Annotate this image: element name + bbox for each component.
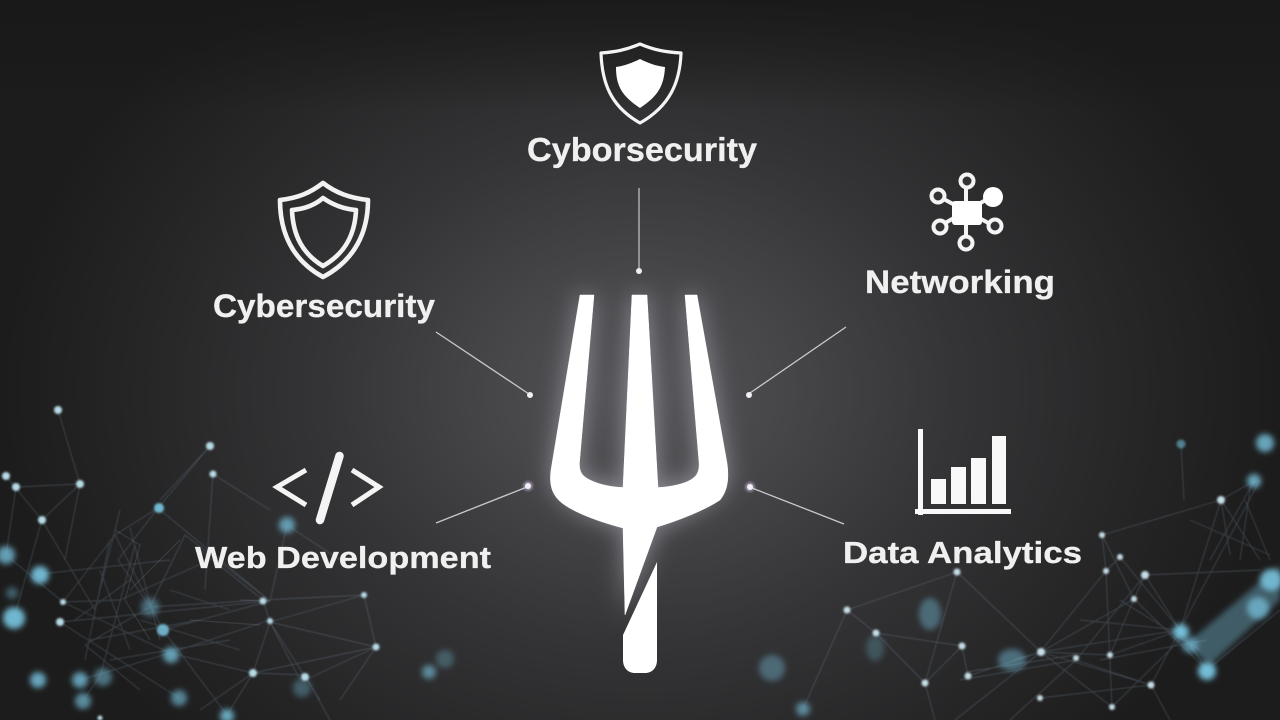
small bright nodes: [844, 496, 1225, 710]
label: Networking: Networking: [865, 264, 1055, 300]
icon: network hub: [932, 174, 1003, 250]
icon: bar chart: [915, 429, 1011, 515]
node: web development: [195, 456, 491, 575]
connector: lower right: [745, 482, 844, 524]
icon: code brackets: [277, 456, 379, 520]
small bright nodes: [2, 406, 380, 720]
label: Cybersecurity: Cybersecurity: [213, 288, 435, 324]
node: top cybersecurity: [527, 44, 758, 168]
label: Cyborsecurity: Cyborsecurity: [527, 131, 758, 168]
label: Data Analytics: Data Analytics: [843, 535, 1082, 570]
central fork icon: [550, 295, 728, 673]
blurred blue band and nodes: [759, 434, 1280, 716]
icon: solid shield: [601, 44, 681, 123]
connector: upper right: [746, 327, 846, 398]
blurred blue nodes: [0, 503, 454, 720]
node: left cybersecurity: [213, 183, 435, 324]
connector lines with endpoints: [436, 188, 846, 524]
icon: double outline shield: [280, 183, 368, 277]
connector: lower left: [436, 481, 533, 523]
connector: top: [636, 188, 642, 274]
node: networking: [865, 174, 1055, 300]
network mesh: bottom left: [0, 406, 454, 720]
network mesh: bottom right: [759, 434, 1280, 720]
connector: upper left: [436, 332, 533, 398]
node: data analytics: [843, 429, 1082, 570]
label: Web Development: Web Development: [195, 540, 491, 575]
